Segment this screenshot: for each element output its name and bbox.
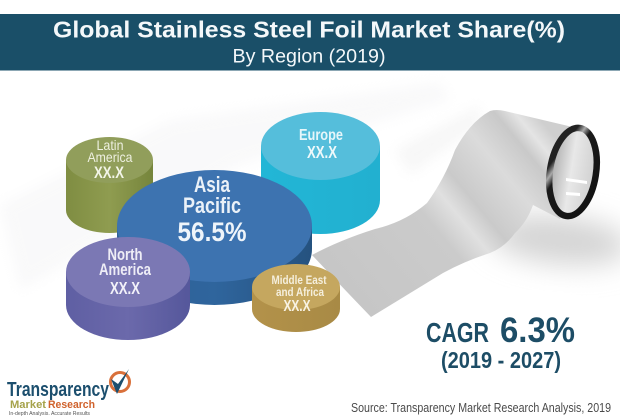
foil roll image (312, 110, 620, 317)
logo tagline: In-depth Analysis. Accurate Results (9, 411, 91, 417)
label: Latin (96, 137, 124, 153)
cylinder: North America (66, 237, 190, 340)
label: North (108, 245, 142, 264)
cylinder: North America: XX.X (110, 278, 140, 298)
logo checkmark icon (110, 369, 130, 394)
label: Europe (299, 127, 343, 144)
CAGR callout: (2019 - 2027) (441, 347, 561, 373)
cylinder: Europe (261, 112, 380, 234)
cylinder: Middle East and Africa: and Africa (276, 285, 324, 299)
cylinder: Latin America: XX.X (94, 163, 125, 182)
cylinder: Latin America (66, 137, 153, 233)
title banner (0, 14, 620, 70)
label: Asia (194, 172, 231, 197)
cylinder: Middle East and Africa: XX.X (284, 298, 311, 315)
cylinder: Middle East and Africa (252, 264, 340, 332)
CAGR callout (426, 311, 575, 373)
cylinder: Europe: XX.X (307, 142, 337, 162)
subtitle: By Region (2019) (232, 46, 386, 68)
faint background tube (0, 82, 480, 290)
cylinder: North America: America (99, 260, 151, 279)
logo (7, 369, 130, 417)
title: Global Stainless Steel Foil Market Share(%) (53, 16, 565, 42)
CAGR callout: CAGR (426, 317, 489, 348)
CAGR callout: 6.3% (500, 311, 575, 350)
cylinder: Asia Pacific (117, 170, 312, 305)
roll rim (543, 124, 603, 220)
label: Middle East (272, 273, 326, 287)
inner highlights (566, 178, 587, 196)
logo: Research (48, 399, 95, 411)
cylinder: Latin America: America (88, 149, 133, 165)
foil sheet (312, 110, 581, 317)
logo: Market (10, 399, 46, 411)
cylinder: Asia Pacific: 56.5% (178, 217, 246, 247)
logo wordmark: Transparency (7, 379, 110, 401)
cylinder: Asia Pacific: Pacific (183, 193, 241, 218)
roll inner (547, 128, 599, 216)
